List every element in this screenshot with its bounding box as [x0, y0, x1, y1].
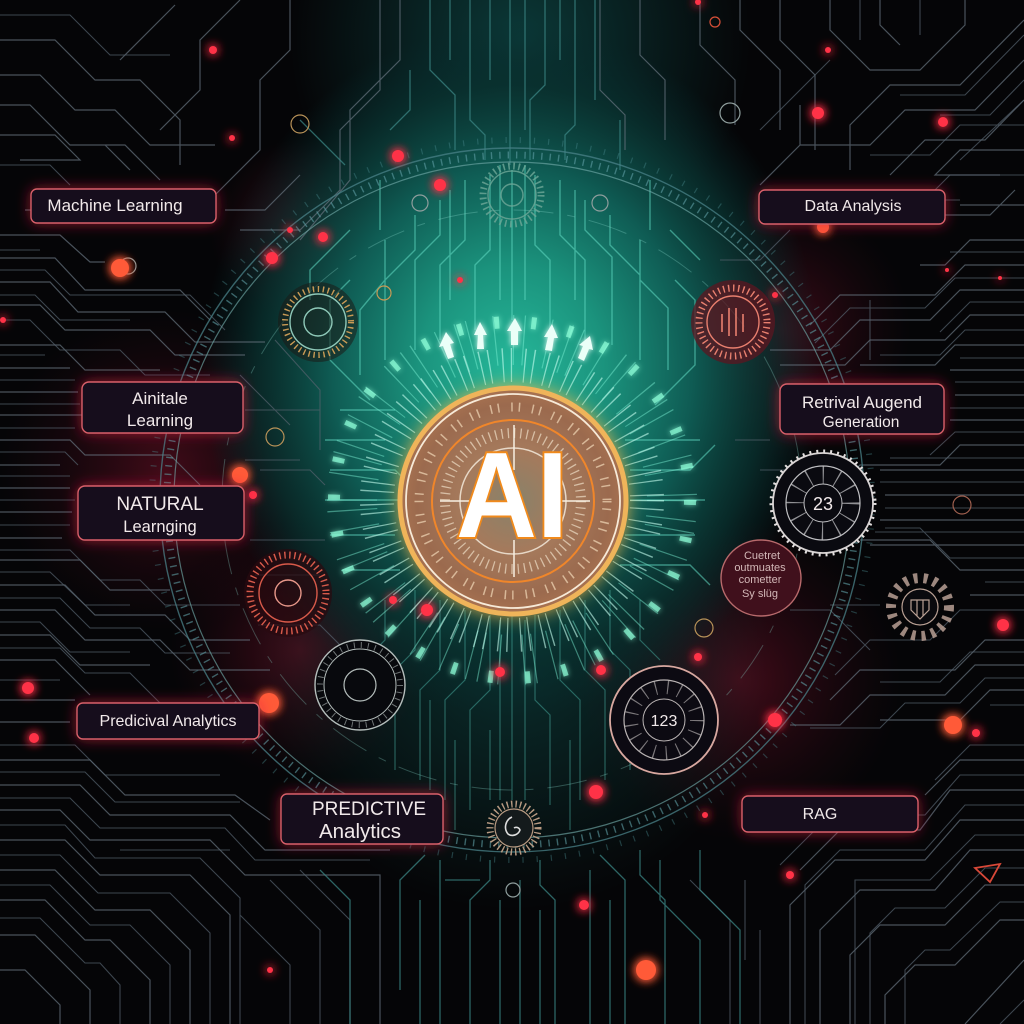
- label: Natural Learnging: Learnging: [123, 518, 197, 536]
- dial: 23: [771, 451, 875, 555]
- label: Predictive Analytics: Analytics: [319, 820, 401, 843]
- gear: bottom spiral: [490, 804, 538, 852]
- label: Machine Learning: Machine Learning: [47, 196, 183, 215]
- orange nodes: [111, 221, 962, 980]
- label: Retrival Augend Generation: [780, 384, 944, 434]
- label: RAG: RAG: [803, 806, 837, 823]
- gear: upper left: [278, 282, 358, 362]
- number 123: 123: [651, 713, 677, 730]
- label: Predicival Analytics: Predicival Analytics: [100, 713, 236, 730]
- label: Ainitale Learning: Learning: [127, 411, 193, 430]
- gear: top: [483, 166, 541, 224]
- number 23: 23: [813, 494, 833, 514]
- radial spokes: [352, 340, 672, 660]
- outer ring: [152, 140, 872, 860]
- gear: upper right: [691, 280, 775, 364]
- small circuit nodes: [120, 17, 1000, 897]
- label: Machine Learning: [31, 189, 216, 223]
- label: Ainitale Learning: Ainitale: [132, 389, 188, 408]
- top and bottom circuit traces: [300, 0, 740, 1024]
- label: Data Analysis: Data Analysis: [805, 198, 901, 215]
- label: Retrival Augend Generation: Generation: [823, 414, 899, 431]
- callout bubble: [721, 540, 801, 616]
- label: Predictive Analytics: [281, 794, 443, 844]
- mint arrows around the hub: [334, 318, 690, 678]
- label: Ainitale Learning: [82, 382, 243, 433]
- label: RAG: [742, 796, 918, 832]
- gear: lower left red: [244, 549, 332, 637]
- central AI coin: [399, 387, 627, 615]
- label: Natural Learnging: NATURAL: [116, 494, 204, 515]
- callout bubble: Cuetret: [744, 550, 780, 562]
- gear: right shield: [891, 578, 949, 636]
- callout bubble: cometter: [739, 574, 782, 586]
- AI title: AI: [456, 427, 568, 563]
- right circuit traces: [600, 0, 1024, 1024]
- label: Data Analysis: [759, 190, 945, 224]
- label: Predictive Analytics: PREDICTIVE: [312, 799, 426, 820]
- circuit traces inside ring: [310, 165, 715, 585]
- callout bubble: outmuates: [734, 562, 786, 574]
- left circuit traces: [0, 0, 400, 1024]
- label: Retrival Augend Generation: Retrival Augend: [802, 393, 922, 412]
- callout bubble: Sy slüg: [742, 588, 778, 600]
- label: Natural Learnging: [78, 486, 244, 540]
- label: Predicival Analytics: [77, 703, 259, 739]
- dial: 123: [610, 666, 718, 774]
- dial: lower left: [315, 640, 405, 730]
